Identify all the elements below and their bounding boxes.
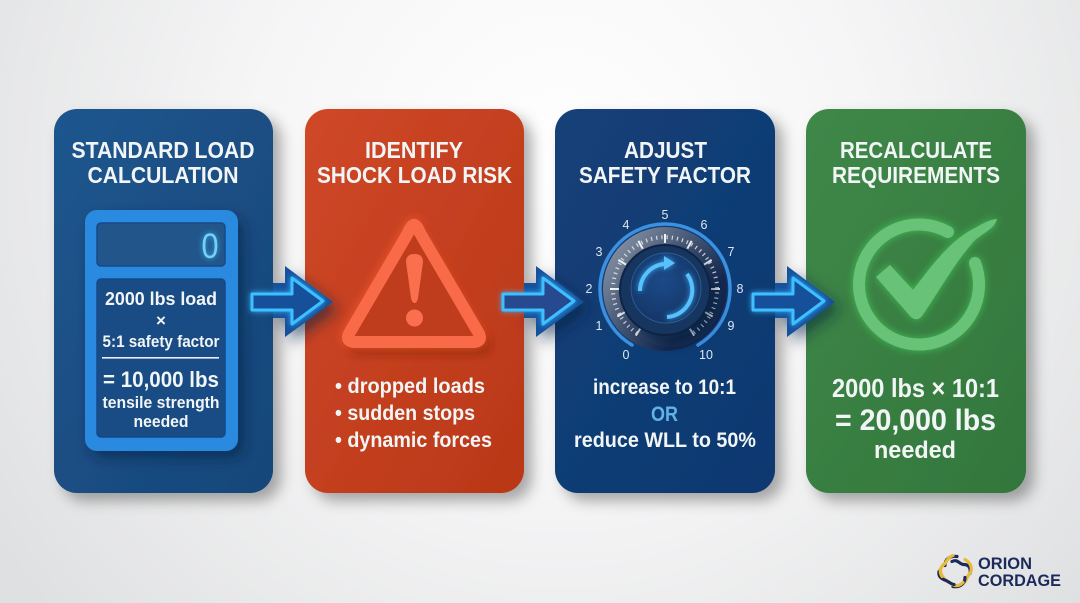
dial numbers: 8 — [737, 282, 744, 296]
formula text: = 10,000 lbs — [103, 367, 219, 392]
calculator — [85, 210, 238, 451]
heading — [72, 137, 254, 188]
dial numbers: 6 — [701, 218, 708, 232]
card background — [54, 109, 273, 493]
dial numbers: 3 — [596, 245, 603, 259]
risk factors list: • dropped loads — [335, 375, 485, 398]
result text: = 20,000 lbs — [835, 404, 996, 437]
formula text: needed — [134, 413, 188, 431]
risk factors list — [335, 375, 492, 452]
dial numbers: 0 — [623, 348, 630, 362]
panel: standard load calculation — [54, 109, 273, 493]
heading: ADJUST — [624, 137, 707, 163]
result text: 2000 lbs × 10:1 — [832, 373, 999, 403]
heading: CALCULATION — [88, 162, 238, 188]
heading: SHOCK LOAD RISK — [317, 162, 512, 188]
formula text: × — [156, 311, 166, 330]
result text: needed — [874, 437, 956, 464]
heading — [832, 137, 1000, 188]
dial knob — [620, 245, 710, 335]
dial numbers: 2 — [586, 282, 593, 296]
formula text: tensile strength — [102, 394, 220, 412]
card background — [555, 109, 775, 493]
adjustment options text: increase to 10:1 — [593, 376, 736, 399]
formula text: 5:1 safety factor — [102, 333, 220, 351]
icon: knot mark — [939, 556, 971, 587]
heading: REQUIREMENTS — [832, 162, 1000, 188]
panel: adjust safety factor — [555, 109, 775, 493]
adjustment options text: reduce WLL to 50% — [574, 429, 756, 452]
heading — [579, 137, 751, 188]
dial tick marks — [610, 234, 720, 336]
dial numbers: 9 — [728, 319, 735, 333]
arrow: step 2 to 3 — [503, 266, 584, 337]
wordmark — [978, 554, 1061, 590]
dial numbers: 7 — [728, 245, 735, 259]
panel: recalculate requirements — [806, 109, 1026, 493]
card background — [806, 109, 1026, 493]
heading: STANDARD LOAD — [72, 137, 254, 163]
wordmark: ORION — [978, 554, 1032, 573]
risk factors list: • sudden stops — [335, 402, 475, 425]
icon: safety factor dial — [586, 208, 744, 362]
dial numbers — [586, 208, 744, 362]
panel: identify shock load risk — [305, 109, 524, 493]
wordmark: CORDAGE — [978, 571, 1061, 590]
calculator display — [97, 223, 225, 266]
calculator formula screen — [97, 279, 225, 437]
formula text: 2000 lbs load — [105, 289, 217, 309]
dial numbers: 1 — [596, 319, 603, 333]
icon: rotate arrows — [640, 256, 692, 317]
icon: check mark in circle — [859, 219, 997, 345]
heading — [317, 137, 512, 188]
dial numbers: 10 — [699, 348, 713, 362]
arrow: step 1 to 2 — [252, 266, 333, 337]
icon: warning triangle — [348, 225, 485, 349]
formula text — [102, 289, 220, 431]
dial scale ring — [603, 227, 727, 351]
adjustment options text: OR — [651, 403, 678, 426]
heading: IDENTIFY — [365, 137, 463, 163]
result text — [832, 373, 999, 464]
card background — [305, 109, 524, 493]
arrow: step 3 to 4 — [753, 266, 835, 337]
heading: SAFETY FACTOR — [579, 162, 751, 188]
digital zero readout: 0 — [202, 227, 218, 266]
dial numbers: 5 — [662, 208, 669, 222]
risk factors list: • dynamic forces — [335, 429, 492, 452]
heading: RECALCULATE — [840, 137, 992, 163]
logo: Orion Cordage — [939, 554, 1061, 590]
dial numbers: 4 — [623, 218, 630, 232]
adjustment options text — [574, 376, 756, 452]
